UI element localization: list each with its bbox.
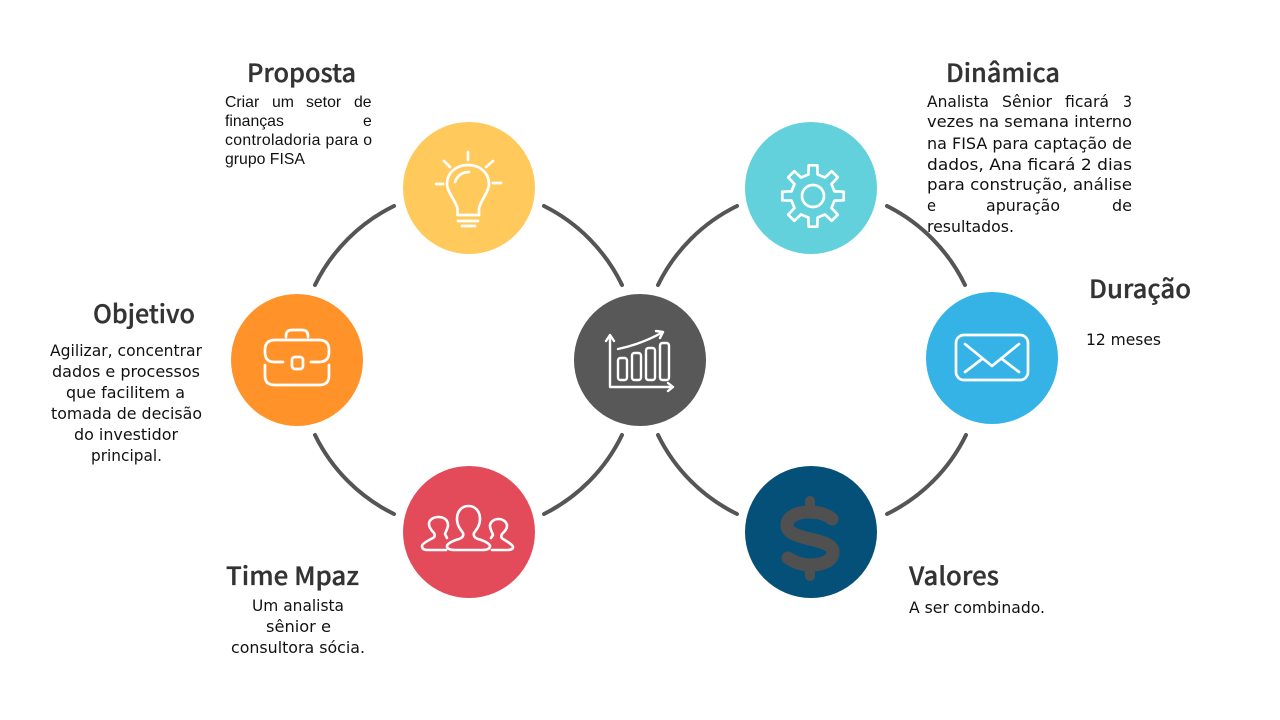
- text: Dinâmica body: vezes na semana interno: [927, 112, 1132, 131]
- text: Proposta body: finanças: [225, 113, 284, 130]
- heading: Valores: Valores: [908, 557, 999, 593]
- text: Dinâmica body: na FISA para captação de: [927, 134, 1132, 153]
- icon: lightbulb: [436, 152, 501, 226]
- right ring arcs: [658, 206, 966, 514]
- text: Dinâmica body: ficará: [1065, 92, 1109, 111]
- node: dollar: [745, 466, 877, 598]
- text: Proposta body: um: [272, 94, 294, 111]
- text: Dinâmica body: de: [1112, 196, 1132, 215]
- text: Dinâmica body: Sênior: [1002, 92, 1052, 111]
- node: envelope: [926, 292, 1058, 424]
- text: Time Mpaz body: consultora sócia.: [231, 638, 365, 657]
- text: Dinâmica body: e: [927, 196, 936, 215]
- text: Proposta body: controladoria para o: [225, 132, 372, 149]
- text: Objetivo body: tomada de decisão: [51, 404, 202, 423]
- text: Time Mpaz body: [231, 596, 365, 657]
- text: Objetivo body: principal.: [91, 446, 162, 465]
- text: Dinâmica body: dados, Ana ficará 2 dias: [927, 155, 1132, 174]
- text: Dinâmica body: [927, 92, 1132, 236]
- heading: Dinâmica: Dinâmica: [946, 54, 1060, 90]
- text: Objetivo body: do investidor: [74, 425, 178, 444]
- text: Proposta body: e: [363, 113, 372, 130]
- icon: dollar sign: [787, 501, 833, 576]
- text: Time Mpaz body: sênior e: [266, 617, 331, 636]
- text: Dinâmica body: para construção, análise: [927, 175, 1132, 194]
- left ring arcs: [315, 206, 622, 514]
- text: Objetivo body: [50, 341, 202, 465]
- text: Dinâmica body: 3: [1123, 92, 1132, 111]
- heading: Proposta: Proposta: [247, 54, 356, 90]
- node: briefcase: [231, 294, 363, 426]
- icon: briefcase: [265, 330, 329, 385]
- text: Valores body: A ser combinado.: [909, 598, 1045, 617]
- node: lightbulb: [403, 122, 535, 254]
- text: Dinâmica body: resultados.: [927, 217, 1014, 236]
- text: Duração body: 12 meses: [1086, 330, 1161, 349]
- heading: Duração: Duração: [1089, 270, 1191, 306]
- node: gear: [745, 122, 877, 254]
- node: chart center: [574, 294, 706, 426]
- heading: Time Mpaz: Time Mpaz: [226, 557, 359, 593]
- node: team: [403, 466, 535, 598]
- text: Proposta body: Criar: [225, 94, 259, 111]
- icon: people: [422, 506, 513, 550]
- text: Proposta body: setor: [306, 94, 341, 111]
- text: Time Mpaz body: Um analista: [252, 596, 344, 615]
- text: Dinâmica body: apuração: [986, 196, 1060, 215]
- text: Proposta body: de: [354, 94, 372, 111]
- text: Objetivo body: dados e processos: [52, 362, 200, 381]
- text: Proposta body: [225, 94, 372, 168]
- text: Objetivo body: Agilizar, concentrar: [50, 341, 202, 360]
- icon: gear: [782, 165, 844, 227]
- text: Dinâmica body: Analista: [927, 92, 989, 111]
- text: Objetivo body: que facilitem a: [66, 383, 185, 402]
- heading: Objetivo: Objetivo: [93, 295, 195, 331]
- icon: envelope: [956, 335, 1028, 380]
- text: Proposta body: grupo FISA: [225, 151, 305, 168]
- icon: bar chart: [606, 331, 673, 391]
